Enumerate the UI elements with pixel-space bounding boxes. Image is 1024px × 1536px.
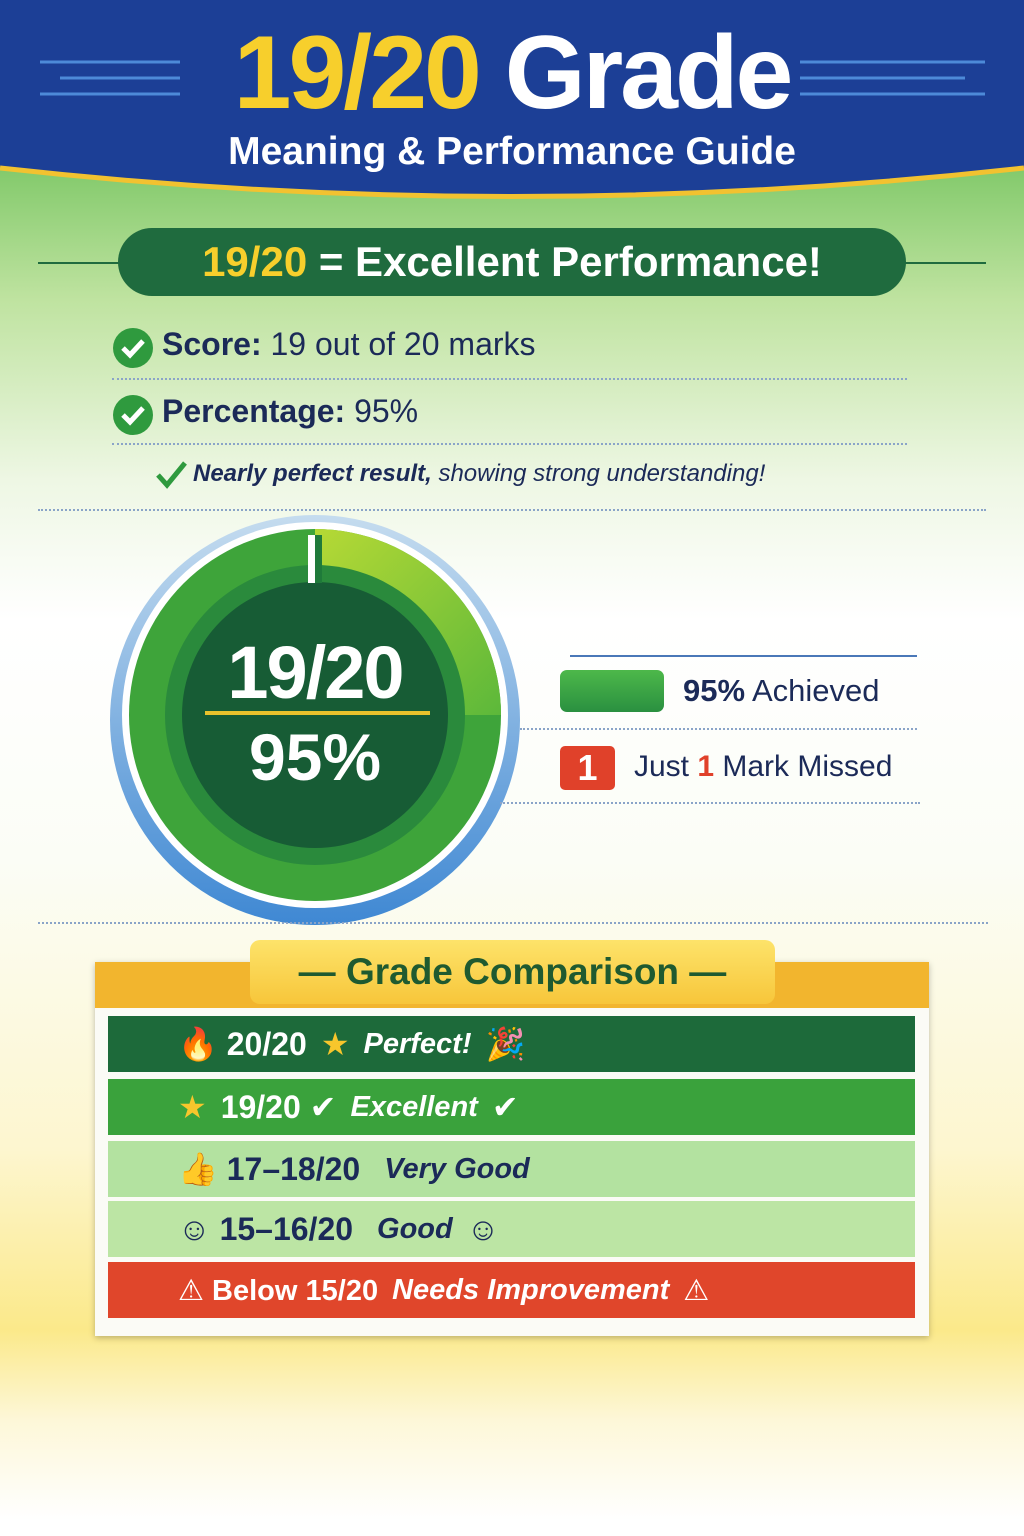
- row: 17-18 very good: Very Good: [384, 1152, 530, 1184]
- row: below 15: Needs Improvement: [392, 1274, 669, 1306]
- row: below 15: ⚠ Below 15/20 ⚠: [178, 1274, 709, 1306]
- header: [0, 0, 1024, 199]
- donut chart: [110, 515, 520, 925]
- panel: grade comparison: [92, 940, 932, 1342]
- row: 19/20 excellent: ★: [178, 1089, 207, 1125]
- note: nearly perfect: Nearly perfect result, showing strong understanding!: [193, 460, 765, 487]
- row: 15-16 good: [108, 1201, 915, 1257]
- row: 19/20 excellent: Excellent: [350, 1090, 478, 1122]
- banner: excellent performance: 19/20 = Excellent Performance!: [202, 238, 822, 285]
- row: 17-18 very good: [108, 1141, 915, 1197]
- stat: 1 mark missed: Just 1 Mark Missed: [634, 750, 892, 783]
- row: 19/20 excellent: 19/20 ✔ ✔: [221, 1089, 519, 1125]
- row: below 15: [108, 1262, 915, 1318]
- heading: grade comparison: — Grade Comparison —: [299, 951, 726, 992]
- row: 17-18 very good: 👍 17–18/20: [178, 1151, 360, 1187]
- row: 15-16 good: Good: [377, 1212, 453, 1244]
- stat: 1 mark missed: 1: [577, 747, 598, 788]
- row: 20/20 perfect: Perfect!: [364, 1028, 472, 1060]
- check: percentage: Percentage: 95%: [162, 393, 418, 429]
- subtitle: Meaning & Performance Guide: [228, 130, 796, 173]
- stat: 95% achieved: 95% Achieved: [683, 673, 879, 708]
- stat: 95% achieved: [560, 670, 879, 712]
- donut chart: 19/20: [227, 631, 403, 714]
- stat: 1 mark missed: [560, 746, 892, 790]
- check: score: Score: 19 out of 20 marks: [162, 326, 536, 362]
- row: 20/20 perfect: [108, 1016, 915, 1072]
- row: 19/20 excellent: [108, 1079, 915, 1135]
- row: 20/20 perfect: 🔥 20/20 🎉: [178, 1026, 525, 1062]
- donut chart: 95%: [249, 720, 381, 794]
- row: 15-16 good: ☺ 15–16/20 ☺: [178, 1210, 499, 1246]
- heading: grade comparison: [250, 940, 775, 1004]
- row: 20/20 perfect: ★: [321, 1026, 350, 1062]
- title: 19/20 Grade: [234, 15, 790, 131]
